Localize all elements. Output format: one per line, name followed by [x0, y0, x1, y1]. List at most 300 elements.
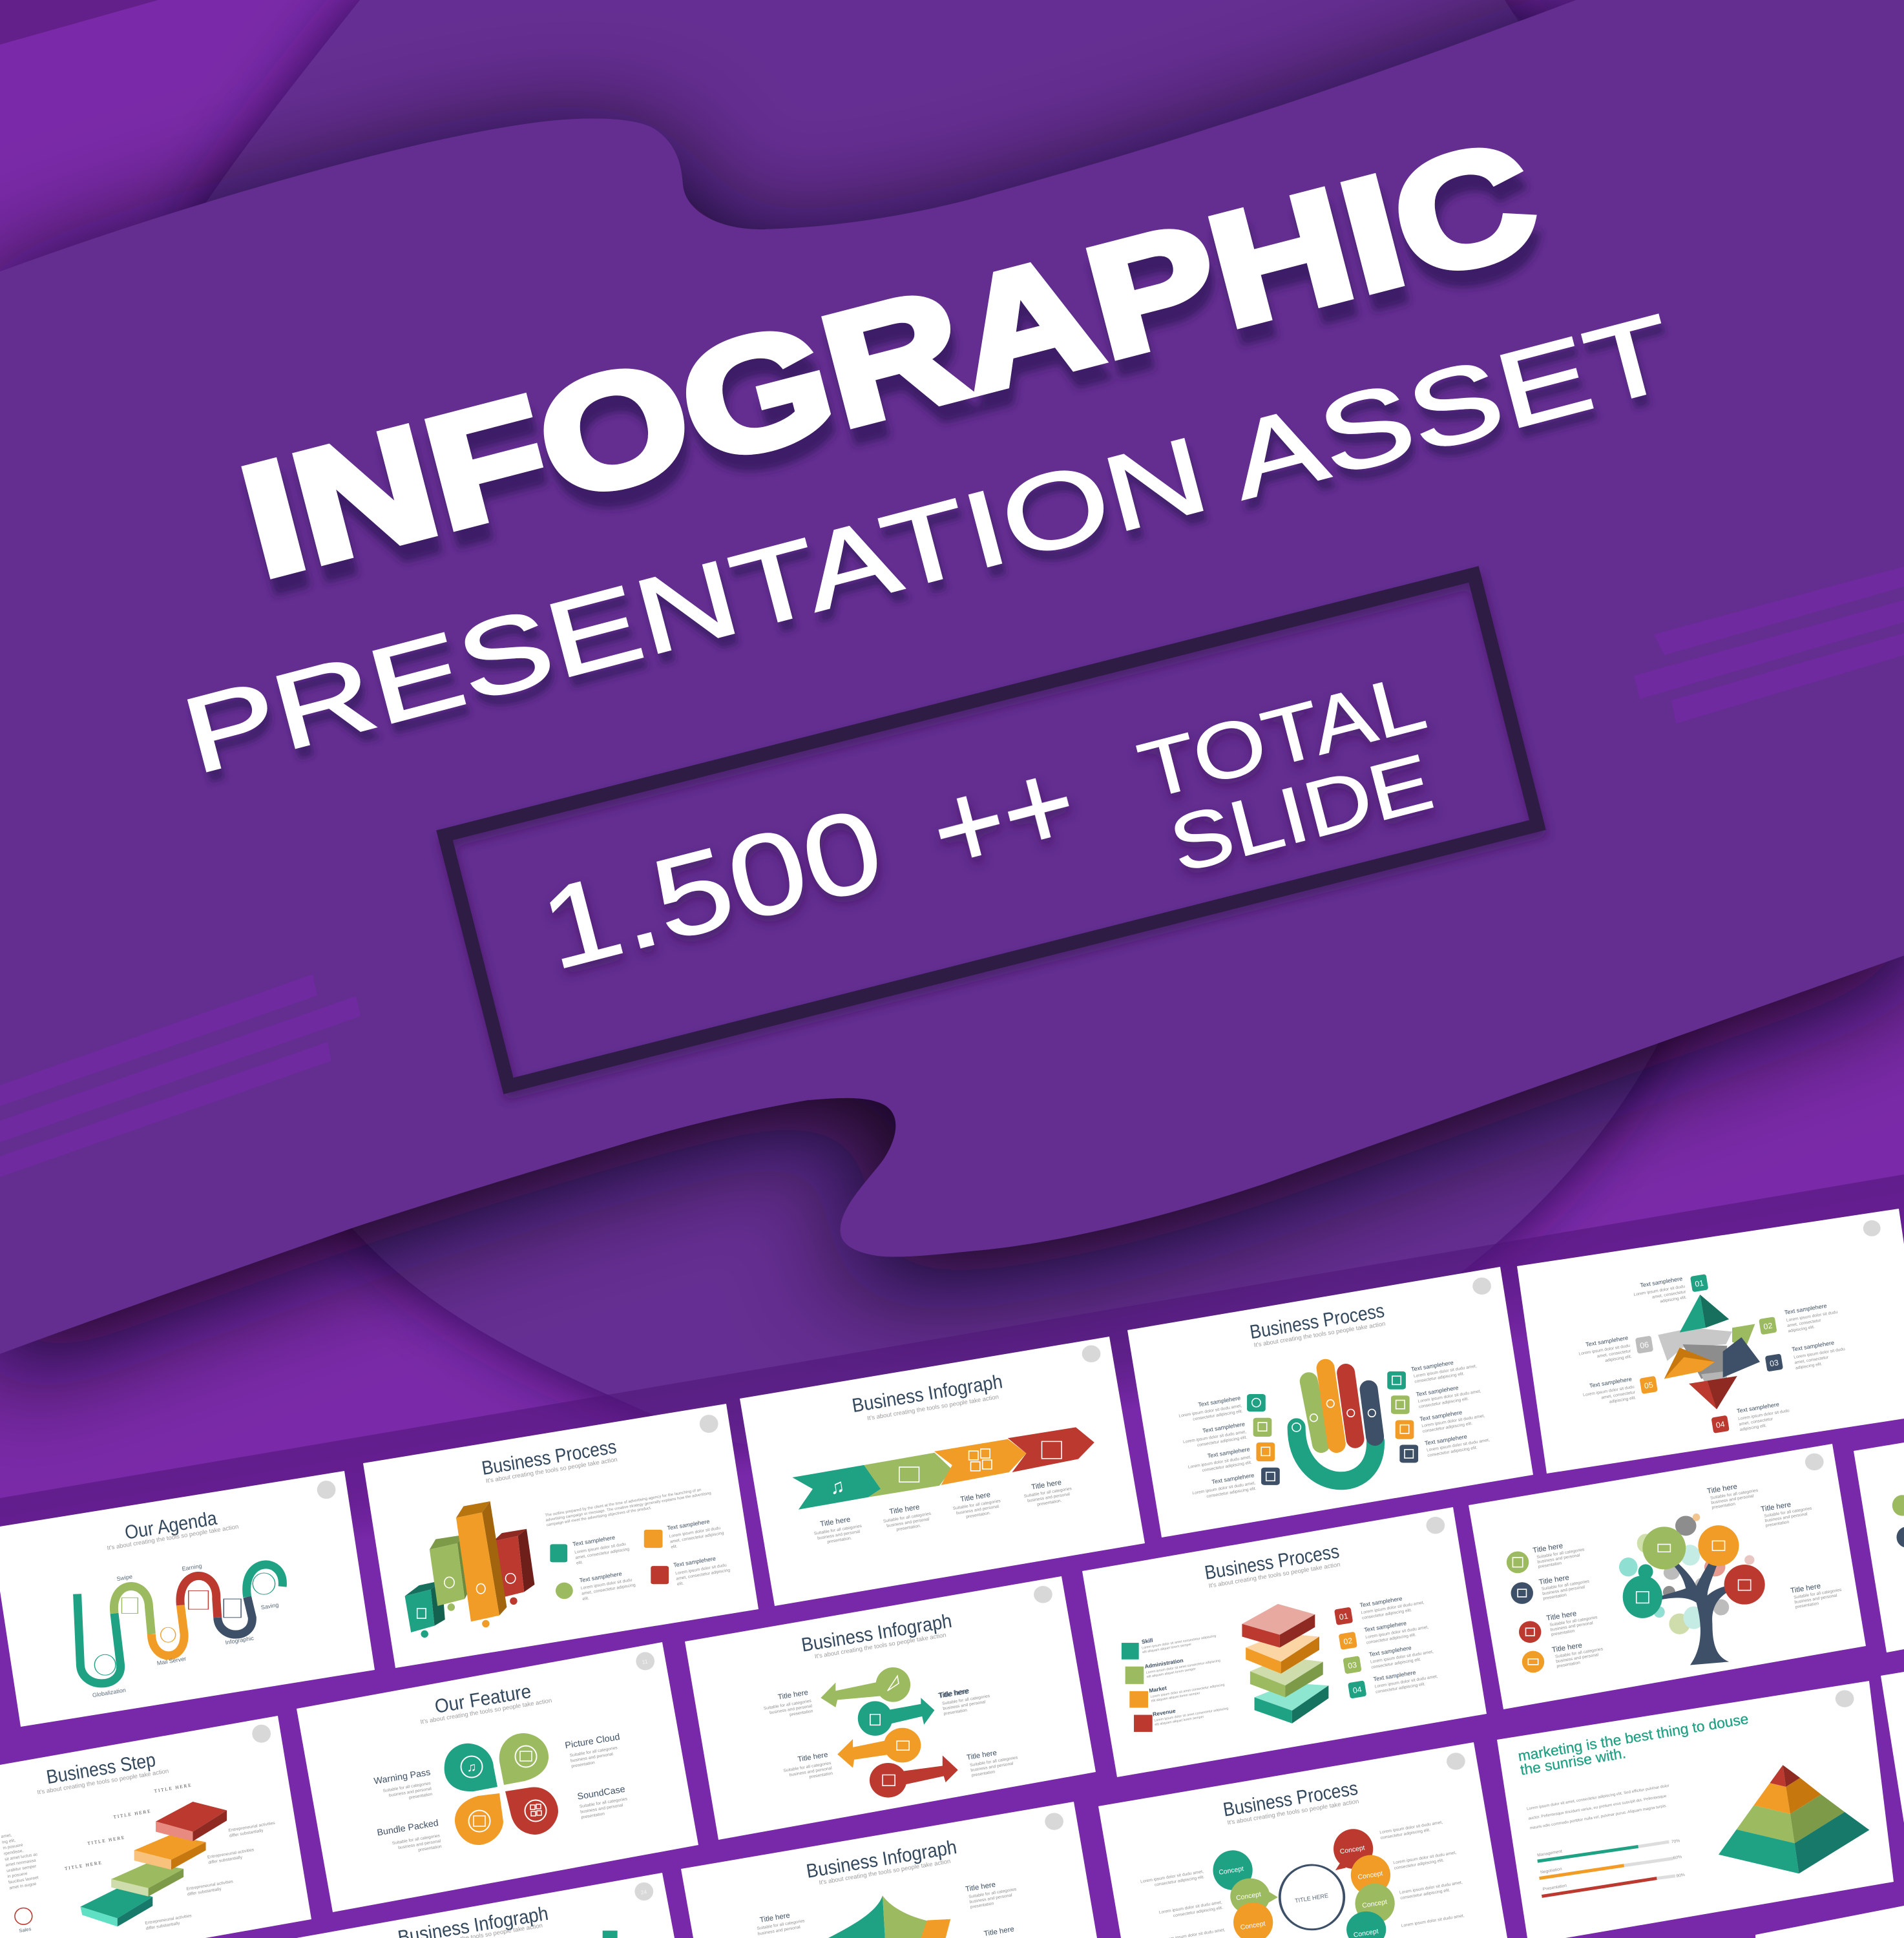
step labels: [64, 1782, 193, 1871]
slide: bottom right corner: [1755, 1906, 1904, 1938]
captions: Text samplehere: [1736, 1401, 1780, 1414]
right captions: Lorem ipsum dolor sit dudu amet,: [1365, 1625, 1429, 1640]
sliver icons: [1892, 1495, 1904, 1548]
feature items: elit.: [576, 1560, 583, 1566]
decorative stripes right: [1634, 567, 1904, 724]
tree bubbles large: [1623, 1525, 1765, 1618]
right captions: Lorem ipsum dolor sit dudu amet,: [1361, 1600, 1425, 1615]
arrow captions: presentation: [790, 1709, 813, 1717]
fan captions: Title here: [759, 1912, 791, 1924]
captions: Text samplehere: [1640, 1275, 1683, 1289]
page number: [1836, 1690, 1854, 1707]
feature items: amet, consectetur adipiscing: [575, 1547, 630, 1560]
slide: our agenda: [0, 1471, 375, 1727]
concept bubbles: Concept: [1357, 1870, 1383, 1881]
right captions: Text samplehere: [1373, 1669, 1416, 1682]
right captions: Title here: [965, 1881, 996, 1893]
concept bubbles: Concept: [1235, 1891, 1262, 1902]
slide: business step: [0, 1716, 311, 1938]
step descriptions: differ substantially: [208, 1855, 243, 1865]
right captions: Title here: [966, 1749, 998, 1762]
number tiles: 02: [1343, 1636, 1353, 1647]
heading: INFOGRAPHIC: INFOGRAPHIC: [225, 107, 1553, 610]
feature captions: [373, 1732, 630, 1857]
right captions: business and personal: [1711, 1494, 1754, 1505]
tree bubbles small: [1619, 1514, 1754, 1634]
title: Business Step: [45, 1749, 157, 1788]
heading: the sunrise with.: [1519, 1744, 1627, 1778]
step descriptions: Entrepreneurial activities: [186, 1879, 234, 1891]
left captions: elit aliquam aliquet lorem semper: [1151, 1691, 1200, 1704]
captions: consectetur adipiscing elit.: [1155, 1875, 1205, 1888]
captions: amet, consectetur: [1739, 1417, 1773, 1427]
left captions: business and personal: [1556, 1652, 1599, 1664]
title: Our Agenda: [123, 1508, 218, 1544]
left paragraph: amet in augue: [9, 1882, 37, 1891]
progress bars: Negotiation: [1540, 1867, 1562, 1875]
outlined box: [445, 574, 1538, 1086]
ribbon captions: business and personal: [817, 1529, 861, 1541]
plus signs: ++: [917, 733, 1090, 901]
left icons: [1507, 1552, 1544, 1672]
feature captions: Suitable for all categories: [569, 1745, 618, 1758]
right captions: business and personal: [1764, 1512, 1808, 1523]
intro paragraph: campaign will meet the advertising objectives of the product.: [546, 1506, 652, 1527]
pyramid: [1719, 1765, 1869, 1873]
slide: cube diagram: [1517, 1209, 1904, 1474]
page number: 11: [642, 1658, 649, 1665]
subtitle: It's about creating the tools so people take action: [107, 1523, 239, 1552]
left captions: business and personal: [1537, 1553, 1581, 1565]
right captions: Suitable for all categories: [970, 1755, 1018, 1767]
feature captions: business and personal: [389, 1787, 432, 1798]
page number: [317, 1481, 335, 1499]
subtitle: It's about creating the tools so people take action: [814, 1632, 947, 1660]
right captions: consectetur adipiscing elit.: [1371, 1657, 1421, 1670]
left captions: Lorem ipsum dolor sit amet consectetur adipiscing: [1150, 1683, 1225, 1699]
right captions: Suitable for all categories: [942, 1694, 990, 1706]
slide backing plate: [0, 1174, 1904, 1938]
right captions: Text samplehere: [1368, 1645, 1412, 1658]
right captions: [965, 1881, 1019, 1938]
title: Business Process: [1248, 1300, 1386, 1343]
feature captions: Warning Pass: [373, 1767, 431, 1787]
icon tiles right: [1387, 1371, 1418, 1463]
title: Business Process: [480, 1436, 618, 1479]
ribbon captions: Suitable for all categories: [813, 1524, 863, 1536]
captions: Text samplehere: [1589, 1376, 1632, 1389]
number tiles: 06: [1639, 1340, 1649, 1350]
page number: [1863, 1220, 1881, 1236]
feature items: Text samplehere: [579, 1570, 622, 1584]
left paragraph: faucibus laoreet: [8, 1875, 39, 1885]
page number: [1426, 1517, 1445, 1534]
icon tiles left: [1247, 1394, 1280, 1485]
left captions: presentation: [1538, 1561, 1562, 1569]
ribbon captions: presentation.: [966, 1511, 991, 1519]
subtitle: It's about creating the tools so people take action: [420, 1697, 552, 1726]
left captions: Lorem ipsum dolor sit amet consectetur adipiscing: [1154, 1707, 1229, 1723]
3d steps: [80, 1802, 227, 1926]
feature items: amet, consectetur adipiscing: [676, 1568, 731, 1581]
title: Business Infograph: [851, 1371, 1004, 1417]
arrows: [821, 1667, 958, 1798]
arrow captions: Title here: [797, 1751, 828, 1764]
ribbon left segments: ♫: [828, 1475, 846, 1499]
feature captions: business and personal: [580, 1803, 623, 1815]
right captions: [1410, 1359, 1491, 1458]
right captions: presentation: [1765, 1520, 1790, 1528]
page number: [1472, 1278, 1491, 1295]
fan captions: Suitable for all categories: [757, 1919, 806, 1931]
captions: Text samplehere: [1585, 1335, 1629, 1348]
concept bubbles: Concept: [1339, 1844, 1365, 1856]
ribbon left segments: [792, 1453, 952, 1510]
ribbon right segments: [934, 1427, 1094, 1485]
feature items: Text samplehere: [673, 1555, 717, 1568]
left paragraph: in posuere: [7, 1871, 28, 1879]
feature captions: presentation: [408, 1792, 433, 1800]
step descriptions: [145, 1821, 277, 1931]
captions: Lorem ipsum dolor sit dudu amet,: [1158, 1901, 1222, 1915]
slide: business process stack: [1082, 1507, 1487, 1777]
step labels: TITLE HERE: [87, 1835, 126, 1846]
page number: [1045, 1813, 1063, 1830]
arrow captions: business and personal: [769, 1704, 813, 1715]
feature items: [550, 1518, 731, 1601]
ribbon captions: Suitable for all categories: [883, 1512, 932, 1524]
title: Business Infograph: [805, 1837, 958, 1882]
right captions: Text samplehere: [1359, 1595, 1403, 1609]
feature items: Lorem ipsum dolor sit dudu: [580, 1578, 633, 1590]
ribbon captions: Suitable for all categories: [1023, 1486, 1072, 1499]
right captions: consectetur adipiscing elit.: [1422, 1421, 1473, 1434]
step labels: TITLE HERE: [113, 1809, 152, 1820]
left captions: Skill: [1141, 1637, 1153, 1645]
large background circle: [131, 0, 1797, 1457]
progress bars: 70%: [1671, 1839, 1680, 1844]
slide: business process hand: [1127, 1267, 1533, 1537]
right captions: Lorem ipsum dolor sit dudu amet,: [1427, 1438, 1491, 1453]
step descriptions: differ substantially: [187, 1887, 222, 1897]
right captions: [937, 1687, 1020, 1778]
feature captions: business and personal: [570, 1752, 614, 1764]
right captions: Lorem ipsum dolor sit dudu amet,: [1418, 1389, 1481, 1404]
right captions: consectetur adipiscing elit.: [1427, 1446, 1478, 1458]
title: Business Infograph: [800, 1610, 954, 1656]
step labels: TITLE HERE: [154, 1782, 193, 1794]
slide: business process concept: [1098, 1742, 1507, 1938]
page number: [634, 1882, 653, 1901]
step labels: [92, 1563, 279, 1698]
right captions: consectetur adipiscing elit.: [1376, 1682, 1426, 1694]
ribbon captions: presentation.: [896, 1524, 921, 1532]
slide: bottom business infograph: [297, 1873, 675, 1938]
captions: Lorem ipsum dolor sit dudu amet,: [1401, 1913, 1465, 1928]
word SLIDE: SLIDE: [1161, 737, 1441, 889]
subtitle: It's about creating the tools so people take action: [1253, 1320, 1386, 1349]
feature captions: SoundCase: [577, 1784, 626, 1802]
progress bars: [1537, 1839, 1686, 1896]
title: Business Process: [1203, 1541, 1341, 1584]
step descriptions: Entrepreneurial activities: [228, 1821, 276, 1833]
captions: amet, consectetur: [1787, 1318, 1822, 1328]
arrow captions: [763, 1687, 970, 1784]
left paragraph: rpendisse,: [3, 1849, 24, 1857]
fan captions: business and personal: [757, 1925, 801, 1937]
page number: 24: [640, 1888, 647, 1896]
feature captions: presentation: [581, 1811, 605, 1820]
captions: consectetur adipiscing elit.: [1380, 1828, 1431, 1840]
progress bars: Management: [1537, 1849, 1563, 1858]
right captions: Suitable for all categories: [968, 1887, 1017, 1899]
right captions: presentation: [970, 1901, 994, 1910]
subtitle: It's about creating the tools so people take action: [485, 1456, 618, 1485]
right captions: business and personal: [969, 1893, 1013, 1904]
feature items: Lorem ipsum dolor sit dudu: [669, 1526, 721, 1539]
left captions: business and personal: [1550, 1621, 1594, 1632]
right captions: business and personal: [970, 1762, 1014, 1773]
step labels: Earning: [182, 1563, 202, 1572]
page number: [252, 1725, 271, 1743]
feature captions: Suitable for all categories: [382, 1781, 432, 1793]
left captions: Suitable for all categories: [1555, 1647, 1604, 1659]
number tiles: 02: [1763, 1321, 1773, 1331]
heading: marketing is the best thing to douse: [1517, 1710, 1750, 1764]
left captions: [1122, 1634, 1229, 1732]
heading: PRESENTATION ASSET: PRESENTATION ASSET: [172, 292, 1685, 796]
left captions: [1533, 1542, 1606, 1669]
right captions: Suitable for all categories: [1764, 1506, 1813, 1519]
captions: amet, consectetur: [1596, 1349, 1632, 1359]
ribbon captions: [952, 1479, 1074, 1521]
center ring: TITLE HERE: [1294, 1892, 1329, 1904]
captions: Lorem ipsum dolor sit dudu: [1786, 1310, 1838, 1323]
captions: Lorem ipsum dolor sit dudu amet,: [1393, 1851, 1457, 1866]
left paragraph: urabitur semper: [6, 1864, 37, 1873]
right captions: Title here: [1706, 1483, 1738, 1495]
right captions: consectetur adipiscing elit.: [1366, 1632, 1417, 1645]
left captions: Title here: [1546, 1610, 1577, 1623]
left captions: Lorem ipsum dolor sit dudu amet,: [1178, 1404, 1242, 1419]
progress bars: Presentation: [1543, 1884, 1567, 1892]
step labels: Swipe: [116, 1573, 133, 1582]
right captions: Text samplehere: [1364, 1620, 1407, 1633]
captions: Text samplehere: [1792, 1339, 1835, 1353]
right captions: Suitable for all categories: [1794, 1588, 1842, 1600]
intro paragraph: The outline prepared by the client at the time of advertising agency for the launching of an: [545, 1488, 702, 1518]
right captions: Text samplehere: [1410, 1359, 1454, 1373]
captions: Lorem ipsum dolor sit dudu: [1738, 1408, 1790, 1421]
captions: adipiscing elit.: [1609, 1395, 1637, 1404]
left paragraph: m posuere: [3, 1843, 23, 1851]
captions: Lorem ipsum dolor sit dudu: [1633, 1284, 1686, 1297]
left captions: Lorem ipsum dolor sit amet consectetur adipiscing: [1142, 1634, 1217, 1651]
feature items: Lorem ipsum dolor sit dudu: [675, 1563, 727, 1576]
left captions: Lorem ipsum dolor sit amet consectetur adipiscing: [1146, 1659, 1220, 1675]
step labels: Mail Server: [156, 1655, 187, 1667]
right captions: Title here: [1790, 1583, 1821, 1595]
intro paragraph: advertising campaign or message. The creative strategy generally explains how the advertising: [545, 1491, 712, 1523]
page number: [700, 1415, 718, 1433]
subtitle: It's about creating the tools so people take action: [1208, 1561, 1341, 1590]
feature items: amet, consectetur adipiscing: [670, 1531, 724, 1544]
number tiles: 03: [1347, 1660, 1357, 1671]
left captions: Text samplehere: [1211, 1472, 1255, 1485]
subtitle: It's about creating the tools so people take action: [866, 1393, 999, 1422]
left captions: elit aliquam aliquet lorem semper: [1147, 1667, 1197, 1679]
left captions: Lorem ipsum dolor sit dudu amet,: [1187, 1455, 1251, 1470]
left captions: consectetur adipiscing elit.: [1202, 1460, 1253, 1473]
captions: Text samplehere: [1784, 1302, 1827, 1316]
center ring: [1280, 1865, 1344, 1930]
number tiles: 04: [1352, 1685, 1363, 1695]
captions: Lorem ipsum dolor sit dudu: [1794, 1347, 1846, 1360]
left captions: consectetur adipiscing elit.: [1193, 1409, 1243, 1422]
step descriptions: differ substantially: [229, 1828, 264, 1839]
ribbon captions: Title here: [959, 1491, 991, 1504]
feature items: amet, consectetur adipiscing: [581, 1583, 636, 1596]
captions: adipiscing elit.: [1660, 1295, 1687, 1304]
page number: [636, 1652, 654, 1671]
captions: consectetur adipiscing elit.: [1394, 1858, 1445, 1871]
word TOTAL: TOTAL: [1130, 658, 1434, 815]
right captions: presentation: [1711, 1502, 1736, 1510]
snake path: [78, 1565, 282, 1683]
right captions: Lorem ipsum dolor sit dudu amet,: [1370, 1650, 1434, 1665]
captions: amet, consectetur: [1794, 1355, 1829, 1365]
captions: Lorem ipsum dolor sit dudu amet,: [1140, 1870, 1204, 1884]
left captions: Suitable for all categories: [1542, 1579, 1590, 1592]
left captions: Title here: [1533, 1542, 1564, 1555]
main purple band: [0, 0, 1904, 1359]
left captions: [1178, 1395, 1257, 1501]
left captions: presentation: [1551, 1629, 1575, 1637]
left captions: Text samplehere: [1207, 1446, 1250, 1459]
paragraph: mauris odio commodo porttitor nulla vel, pulvinar purus. Aliquam magna turpis.: [1529, 1804, 1668, 1831]
feature items: Text samplehere: [572, 1534, 616, 1547]
left captions: Title here: [1551, 1641, 1583, 1654]
title: Business Process: [1222, 1778, 1359, 1821]
step descriptions: Entrepreneurial activities: [145, 1913, 193, 1926]
right captions: Lorem ipsum dolor sit dudu amet,: [1374, 1674, 1438, 1689]
clover petals: [445, 1733, 558, 1845]
page number: [1082, 1345, 1100, 1362]
sales icon: [15, 1908, 32, 1933]
captions: adipiscing elit.: [1788, 1325, 1815, 1334]
subtitle: It's about creating the tools so people take action: [37, 1767, 169, 1797]
feature captions: presentation: [418, 1844, 442, 1853]
arrow captions: Title here: [777, 1689, 809, 1702]
left captions: Suitable for all categories: [1549, 1615, 1598, 1627]
snake icons: [94, 1573, 275, 1675]
step descriptions: differ substantially: [145, 1921, 181, 1931]
concept bubbles: [1213, 1829, 1395, 1938]
total slide count: [528, 658, 1441, 994]
feature captions: Bundle Packed: [376, 1818, 439, 1839]
captions: Lorem ipsum dolor sit dudu: [1578, 1344, 1631, 1357]
left captions: presentation: [1543, 1593, 1567, 1601]
layered stack: [1242, 1604, 1328, 1724]
arrow captions: Title here: [939, 1687, 970, 1700]
feature items: Text samplehere: [667, 1518, 710, 1532]
cube graphic: [1658, 1295, 1760, 1409]
slide: business infograph ribbon: [740, 1337, 1145, 1606]
left captions: Text samplehere: [1202, 1421, 1246, 1434]
arrow captions: presentation: [809, 1771, 833, 1780]
ribbon captions: business and personal: [886, 1517, 930, 1528]
right captions: Title here: [937, 1687, 969, 1700]
left captions: Market: [1149, 1685, 1167, 1694]
left captions: elit aliquam aliquet lorem semper: [1142, 1643, 1192, 1654]
arrow captions: Suitable for all categories: [783, 1761, 832, 1773]
slide: business infograph arrows: [685, 1576, 1096, 1840]
feature captions: business and personal: [398, 1839, 441, 1850]
slide: right edge sliver upper: [1854, 1443, 1904, 1652]
left paragraph: amet nonmassa: [5, 1859, 36, 1868]
decorative stripes left: [0, 974, 361, 1177]
left captions: Text samplehere: [1198, 1395, 1241, 1408]
fan captions: [757, 1912, 806, 1937]
ribbon captions: [813, 1503, 934, 1547]
step descriptions: Entrepreneurial activities: [207, 1848, 255, 1860]
left captions: Revenue: [1152, 1707, 1176, 1718]
gift icon: [603, 1931, 618, 1938]
left captions: business and personal: [1542, 1585, 1585, 1596]
step labels: Infographic: [225, 1635, 255, 1646]
right captions: Title here: [983, 1926, 1015, 1938]
top-left corner shade: [0, 0, 158, 45]
left captions: Suitable for all categories: [1536, 1547, 1585, 1559]
captions: amet, consectetur: [1652, 1289, 1687, 1300]
ribbon captions: presentation.: [827, 1536, 852, 1545]
concept bubbles: Concept: [1219, 1866, 1244, 1877]
left captions: Lorem ipsum dolor sit dudu amet,: [1192, 1481, 1256, 1495]
concept bubbles: Concept: [1362, 1899, 1388, 1910]
captions: adipiscing elit.: [1739, 1423, 1767, 1432]
concept bubbles: Concept: [1240, 1921, 1266, 1932]
feature items: Lorem ipsum dolor sit dudu: [574, 1542, 627, 1555]
sales icon: Sales: [19, 1926, 32, 1933]
arrow captions: Suitable for all categories: [763, 1699, 812, 1711]
right captions: Text samplehere: [1424, 1433, 1467, 1446]
progress bars: 90%: [1676, 1873, 1686, 1879]
ribbon captions: presentation.: [1037, 1499, 1062, 1507]
subtitle: It's about creating the tools so people take action: [1227, 1798, 1359, 1827]
left paragraph: amet,: [1, 1833, 12, 1839]
right captions: business and personal: [1794, 1593, 1838, 1605]
captions: Lorem ipsum dolor sit dudu amet,: [1399, 1881, 1463, 1895]
right captions: Text samplehere: [1419, 1409, 1463, 1422]
left captions: consectetur adipiscing elit.: [1206, 1486, 1257, 1499]
arrow captions: business and personal: [789, 1766, 833, 1778]
captions: adipiscing elit.: [1795, 1362, 1823, 1371]
hand graphic: [1292, 1368, 1376, 1481]
fan graphic: [828, 1895, 950, 1938]
feature captions: presentation: [571, 1760, 596, 1769]
left paragraph: sit amet luctus ac: [5, 1852, 38, 1862]
captions: amet, consectetur: [1601, 1390, 1636, 1400]
captions: [1578, 1275, 1847, 1432]
feature items: elit.: [582, 1596, 590, 1601]
right captions: consectetur adipiscing elit.: [1419, 1397, 1469, 1410]
paragraph: auctor. Pellentesque tincidunt varius, eu pretium eros suscipit dui. Pellentesque: [1528, 1794, 1667, 1821]
number tiles: [1334, 1607, 1366, 1699]
left captions: presentation: [1556, 1660, 1581, 1669]
left captions: consectetur adipiscing elit.: [1197, 1435, 1248, 1448]
slide: tree diagram: [1469, 1444, 1866, 1709]
feature captions: Suitable for all categories: [579, 1797, 628, 1809]
